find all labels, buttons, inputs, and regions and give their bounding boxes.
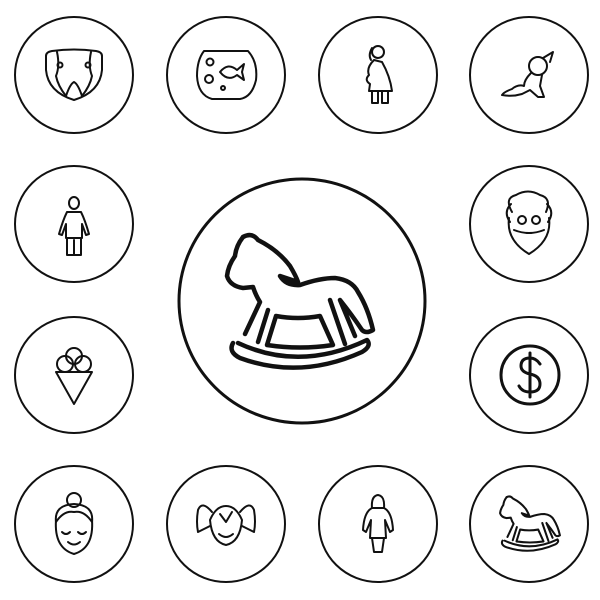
- icon: diaper: [15, 17, 133, 133]
- icon: boy: [15, 166, 133, 282]
- icon: ice cream: [15, 317, 133, 433]
- icon: grandmother: [15, 466, 133, 582]
- icon: rocking horse small: [470, 466, 588, 582]
- icon: dollar coin: [470, 317, 588, 433]
- icon: pregnant woman: [319, 17, 437, 133]
- icon: woman: [319, 466, 437, 582]
- icon: girl face: [167, 466, 285, 582]
- icon: fish bowl: [167, 17, 285, 133]
- icon: rocking horse large: [179, 179, 425, 423]
- icon: crawling baby: [470, 17, 588, 133]
- icon: grandfather: [470, 166, 588, 282]
